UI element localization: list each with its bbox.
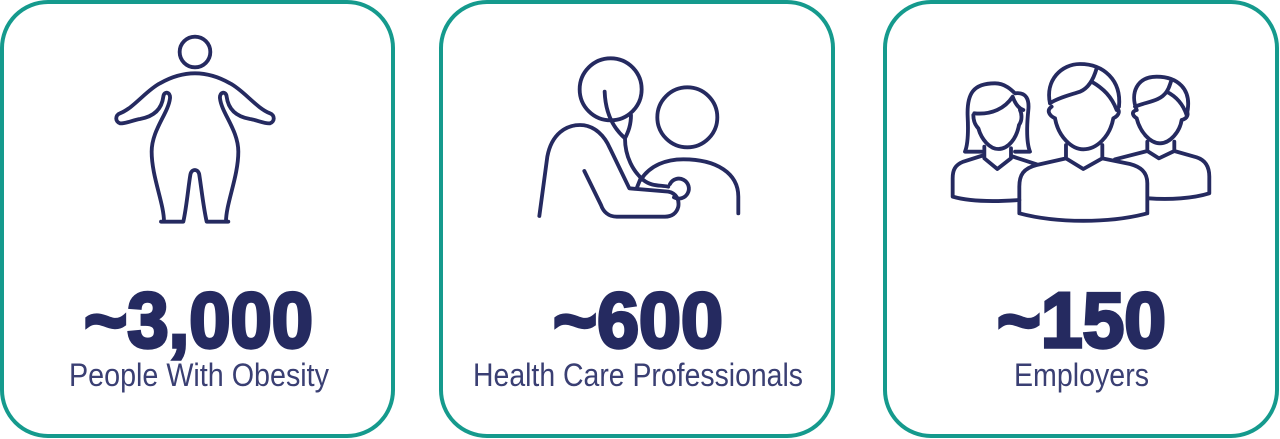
card outline: [885, 2, 1277, 436]
card outline: [2, 2, 393, 436]
statistic: 600: ~600: [553, 276, 723, 364]
icon: group of three people: [953, 64, 1209, 221]
icon: person with obesity: [116, 37, 274, 222]
icon: doctor with stethoscope and patient: [539, 58, 738, 217]
panel: people with obesity: [2, 2, 393, 436]
card outline: [441, 2, 833, 436]
statistic: 150: ~150: [997, 276, 1166, 364]
statistic: 3,000: ~3,000: [84, 276, 313, 364]
label: people with obesity: People With Obesity: [69, 357, 329, 393]
label: health care professionals: Health Care Professionals: [473, 357, 803, 393]
label: employers: Employers: [1014, 357, 1149, 393]
panel: employers: [885, 2, 1277, 436]
panel: health care professionals: [441, 2, 833, 436]
